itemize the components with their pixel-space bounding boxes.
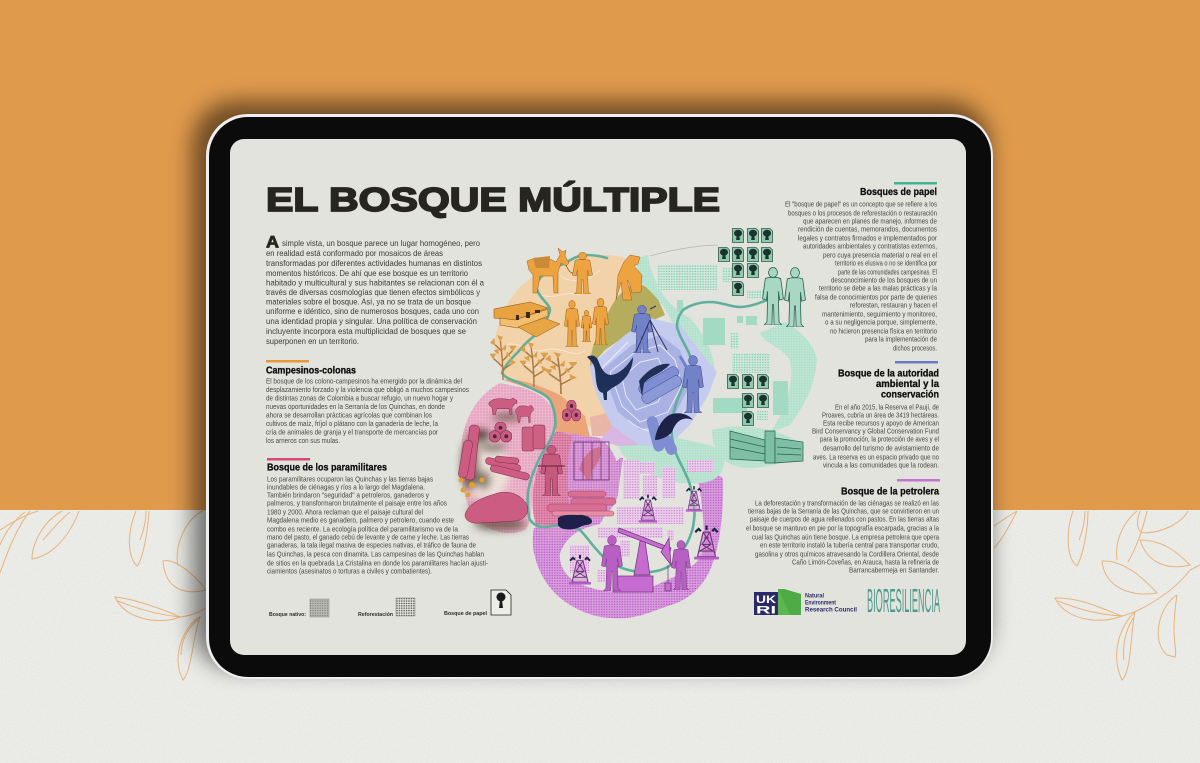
icons: cut stumps — [489, 400, 581, 442]
title: EL BOSQUE MÚLTIPLE — [266, 181, 720, 218]
illustrations: conservation forest — [632, 305, 703, 457]
heading: autoridad ambiental y la conservación: ambiental y la — [876, 379, 939, 390]
region: salmon patch — [503, 379, 590, 437]
figures: campesino family — [564, 298, 609, 347]
text: BIORESILIENCIA — [867, 582, 940, 619]
panel: bosques de papel: no hicieron presencia física en territorio — [830, 326, 937, 336]
logo: UKRI — [754, 589, 801, 616]
icon: logs with dark fish — [637, 364, 684, 405]
icon: barrels — [522, 425, 545, 451]
region: rosy patch — [590, 412, 628, 436]
panel: bosques de papel: legales y contratos firmados e implementados por — [798, 234, 938, 242]
panel: bosques de papel: dichos procesos. — [893, 344, 937, 352]
region: peach campesino forest — [495, 255, 626, 432]
panel: bosque de la petrolera: Caño Limón-Coveñas, en Arauca, hasta la refinería de — [792, 558, 939, 566]
panel: bosque de la petrolera: gasolina y otros químicos atravesando la Cordillera Oriental, desde — [755, 550, 939, 558]
icon: mule — [527, 248, 578, 293]
figure: man pointing — [680, 356, 703, 413]
icon: flames — [458, 478, 521, 519]
panel: autoridad ambiental: Bird Conservancy y Global Conservation Fund — [812, 426, 939, 436]
icon: pipeline logs — [547, 491, 616, 516]
icon: toucan on log — [646, 413, 693, 457]
text block: introduction: uniforme e idéntico, sino de numerosos bosques, cada uno con — [266, 306, 479, 316]
panel: bosque de los paramilitares: mano del pasto, el ganado cebú de levante y de carne y leche. Las tierras — [267, 532, 469, 542]
illustrations: paper forest — [718, 228, 805, 463]
text block: introduction: momentos históricos. De ahí que ese bosque es un territorio — [266, 268, 468, 278]
legend item: bosque nativo: Bosque nativo: — [269, 612, 306, 618]
illustrations: oil forest — [569, 486, 719, 592]
icon: burning vertical logs — [458, 425, 480, 480]
panel: autoridad ambiental: Proaves, cubría un área de 3419 hectáreas. — [822, 410, 939, 420]
logo: UKRI: UK — [756, 594, 776, 606]
panel: autoridad ambiental: En el año 2015, la Reserva el Paují, de — [835, 402, 939, 412]
panel: bosque de la petrolera: La deforestación y transformación de las ciénagas se realizó en las — [755, 498, 939, 508]
panel: bosque de los paramilitares: de sitios en la quebrada La Cristalina en donde los paramilitares hacían ajusti- — [267, 558, 489, 568]
region: mint paper forest — [618, 255, 817, 483]
icons: oil derricks — [569, 486, 719, 585]
panel: autoridad ambiental: desarrollo del turismo de avistamiento de — [823, 444, 939, 452]
icons: cultivated plants — [489, 335, 578, 394]
panel: bosque de la petrolera: Barrancabermeja en Santander. — [849, 566, 939, 574]
smoke and burn marks — [461, 412, 526, 531]
botanical line drawing: right — [994, 511, 1200, 680]
drop cap A: A — [266, 234, 279, 252]
panel: bosques de papel: o a su negligencia porque, simplemente, — [825, 318, 937, 326]
figures: two suited men — [763, 268, 805, 327]
logo text: Natural Environment Research Council: Environment — [805, 600, 837, 606]
figure: bending farmer — [616, 255, 642, 300]
panel: autoridad ambiental: vincula a las comunidades que la rodean. — [823, 460, 939, 470]
text block: introduction: materiales sobre el bosque. Así, ya no se trata de un bosque — [266, 296, 471, 306]
region: rose soldier zone — [533, 431, 572, 526]
icon: government building — [730, 431, 803, 463]
text block: introduction: superponen en un territorio. — [266, 336, 359, 346]
figure: muleteer — [573, 252, 592, 294]
icon: farmhouse — [494, 302, 560, 337]
legend item: reforestación: Reforestación — [358, 612, 394, 618]
background: orange upper band — [0, 0, 1200, 510]
botanical line drawing: left — [0, 510, 206, 680]
heading: paramilitares: Bosque de los paramilitares — [267, 462, 387, 474]
text block: introduction — [266, 234, 484, 346]
region: pink paramilitary forest — [461, 383, 556, 533]
panel: campesinos-colonos: cría de animales de granja y el transporte de mercancías por — [266, 428, 439, 436]
panel: bosques de papel: autoridades ambientales y contratistas externos, — [803, 242, 937, 250]
legend — [269, 590, 511, 618]
panel: bosques de papel: parte de las comunidades campesinas. El — [838, 268, 937, 276]
logo text: Natural Environment Research Council: Research Council — [805, 606, 857, 614]
text block: introduction: través de diversas cosmologías que tienen efectos simbólicos y — [266, 287, 481, 297]
region: olive patch — [590, 283, 665, 367]
panel: bosque de los paramilitares: combo es reciente. La ecología política del paramilitarismo va de la — [267, 524, 458, 534]
text block: introduction: una identidad propia y singular. Una política de conservación — [266, 316, 477, 326]
region: petrolera (purple outer ring) — [533, 458, 723, 618]
panel: bosque de los paramilitares — [267, 458, 489, 576]
legend item: bosque nativo — [269, 599, 329, 618]
panel: bosque de los paramilitares: inundables de ciénagas y ríos a lo largo del Magdalena. — [267, 482, 425, 492]
panel: bosques de papel: territorio es elusiva o no se identifica por — [835, 258, 937, 268]
panel: bosque de los paramilitares: palmeros, y transformaron brutalmente el paisaje entre los años — [267, 498, 447, 508]
legend item: bosque de papel — [444, 590, 511, 617]
panel: bosques de papel: rendición de cuentas, memorandos, documentos — [798, 224, 937, 234]
panel: campesinos-colonos: nuevas oportunidades en la Serranía de los Quinchas, en donde — [266, 402, 445, 411]
panel: bosque de los paramilitares: 1980 y 2000. Ahora reclaman que el paisaje cultural del — [267, 508, 423, 516]
figure: soldier — [538, 446, 565, 496]
illustrations: campesino forest — [489, 248, 642, 400]
icon: burned machinery — [465, 492, 528, 523]
icons: paper documents lower cluster — [728, 374, 768, 426]
heading: autoridad ambiental y la conservación — [838, 368, 939, 400]
panel: autoridad ambiental: aves. La reserva es un espacio privado que no — [813, 452, 939, 462]
panel: campesinos-colonos — [266, 360, 469, 445]
panel: bosque de la petrolera: en este territorio instaló la tubería central para transportar crudo, — [760, 540, 939, 550]
text block: introduction: habitado y multicultural y sus habitantes se relacionan con él a — [266, 278, 484, 288]
panel: bosque de los paramilitares: Los paramilitares ocuparon las Quinchas y las tierras bajas — [267, 474, 433, 484]
panel: bosque de los paramilitares: ganaderas, la tala ilegal masiva de especies nativas, el tráfico de fauna de — [267, 540, 476, 550]
region: magenta and rose center — [533, 431, 619, 542]
panel: bosque de los paramilitares: También brindaron "seguridad" a petroleros, ganaderos y — [267, 490, 429, 500]
tablet device — [206, 114, 993, 679]
thin top outline — [650, 245, 718, 256]
panel: campesinos-colonos: cultivos de maíz, fríjol o plátano con la ganadería de leche, la — [266, 419, 438, 428]
illustrations: paramilitary forest — [458, 398, 616, 529]
figure: man with tripod — [632, 305, 667, 353]
text block: introduction: transformadas por diferentes actividades humanas en distintos — [266, 258, 482, 268]
text block: introduction: simple vista, un bosque parece un lugar homogéneo, pero — [282, 238, 480, 248]
panel: bosques de papel: territorio se debe a las malas prácticas y la — [819, 284, 937, 292]
panel: bosques de papel: que aparecen en planes de manejo, informes de — [803, 216, 937, 226]
panel: bosque de la petrolera: cual las Quinchas aún tiene bosque. La empresa petrolera que opera — [752, 532, 939, 542]
panel: bosques de papel: El "bosque de papel" es un concepto que se refiere a los — [785, 200, 937, 208]
panel: campesinos-colonos: de distintas zonas de Colombia a buscar refugio, un nuevo hogar y — [266, 394, 453, 402]
panel: bosque de los paramilitares: las Quinchas, la pesca con dinamita. Las campesinas de las Quinchas hablan — [267, 550, 484, 558]
icon: dark bird — [587, 356, 633, 400]
panel: bosques de papel: desconocimiento de los bosques de un — [831, 276, 937, 284]
panel: autoridad ambiental: para la promoción, la protección de aves y el — [820, 434, 939, 444]
panel: bosques de papel — [785, 182, 938, 352]
panel: bosques de papel: reforestan, restauran y hacen el — [850, 300, 937, 310]
logo: UKRI: RI — [756, 604, 776, 616]
panel: autoridad ambiental — [812, 361, 939, 470]
dotted and solid plots — [570, 265, 788, 582]
legend item: reforestación — [358, 598, 415, 618]
legend item: bosque de papel: Bosque de papel — [444, 611, 487, 617]
icon: oil pumpjack — [613, 528, 671, 592]
panel: bosques de papel: bosques o los procesos de reforestación o restauración — [788, 208, 937, 218]
purple lilac fringe — [600, 426, 640, 446]
panel: campesinos-colonos: los arrieros con sus mulas. — [266, 436, 340, 445]
region: petrolera interior clearing — [560, 458, 704, 592]
tablet shadow — [192, 101, 990, 669]
background: textured paper lower band — [0, 510, 1200, 763]
text block: introduction: en realidad está conformado por mosaicos de áreas — [266, 248, 443, 258]
heading: bosques de papel: Bosques de papel — [860, 187, 937, 198]
river — [502, 255, 767, 572]
heading: petrolera: Bosque de la petrolera — [841, 486, 939, 498]
panel: bosque de la petrolera — [746, 479, 940, 574]
panel: campesinos-colonos: El bosque de los colono-campesinos ha emergido por la dinámica del — [266, 376, 462, 386]
panel: bosque de la petrolera: tierras bajas de la Serranía de las Quinchas, que se convirtieron en un — [748, 506, 939, 516]
region: blue-violet conservation forest — [590, 318, 717, 448]
panel: bosque de la petrolera: el bosque se mantuvo en pie por la topografía escarpada, gracias a la — [746, 524, 939, 532]
icon: dark oil spill — [558, 515, 592, 529]
logo text: Natural Environment Research Council — [805, 592, 857, 614]
heading: autoridad ambiental y la conservación: conservación — [881, 390, 939, 400]
panel: autoridad ambiental: Esta recibe recursos y apoyo de American — [823, 418, 939, 428]
panel: bosque de los paramilitares: ciamientos (asesinatos o torturas a civiles y combatientes). — [267, 566, 432, 576]
text block: introduction: incluyente incorpora esta multiplicidad de bosques que se — [266, 326, 466, 336]
icon: cut logs pile — [485, 456, 530, 481]
icons: paper documents upper cluster — [718, 228, 772, 296]
heading: autoridad ambiental y la conservación: Bosque de la autoridad — [838, 368, 939, 380]
figures: oil workers — [602, 536, 690, 591]
logo text: Natural Environment Research Council: Natural — [805, 592, 824, 600]
panel: campesinos-colonos: ahora se desarrollan prácticas agrícolas que combinan los — [266, 410, 432, 420]
heading: campesinos-colonas: Campesinos-colonas — [266, 366, 356, 376]
map: territory — [461, 245, 817, 618]
panel: bosque de la petrolera: paisaje de cuerpos de agua rellenados con pastos. En las tierras altas — [750, 514, 939, 524]
panel: campesinos-colonos: desplazamiento forzado y la violencia que obligó a muchos campesinos — [266, 385, 469, 394]
panel: bosques de papel: pero cuya presencia material o real en el — [823, 250, 937, 260]
panel: bosques de papel: mantenimiento, seguimiento y monitoreo, — [822, 310, 937, 318]
icon: caged bird — [574, 442, 609, 480]
panel: bosques de papel: falsa de conocimientos por parte de quienes — [815, 292, 937, 302]
panel: bosques de papel: para la implementación de — [865, 334, 937, 344]
panel: bosque de los paramilitares: Magdalena medio es ganadero, palmero y petrolero, cuando este — [267, 516, 454, 524]
icons: cattle — [489, 398, 533, 423]
